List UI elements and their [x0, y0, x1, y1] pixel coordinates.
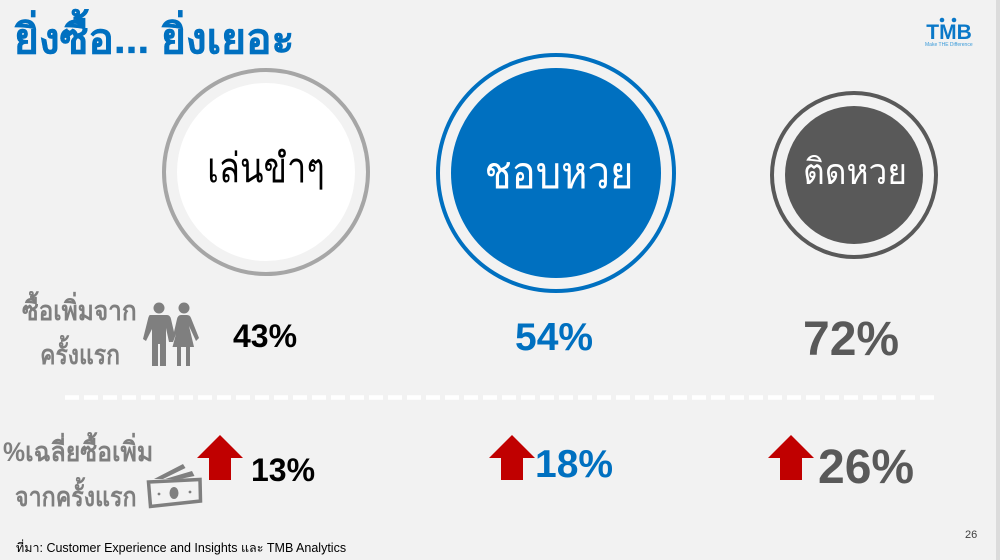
page number: 26 [965, 529, 977, 541]
source note: ที่มา: Customer Experience and Insights และ TMB Analytics [16, 541, 346, 555]
value: 43%: 43% [233, 318, 297, 354]
title: ยิ่งซื้อ... ยิ่งเยอะ [14, 16, 294, 62]
icon: couple [143, 302, 199, 366]
circle label light: เล่นขำๆ [207, 145, 325, 191]
value: 72%: 72% [803, 313, 899, 366]
arrow 2 [489, 435, 535, 480]
right edge strip [996, 0, 1000, 560]
circle label blue: ชอบหวย [485, 149, 633, 198]
logo: TMB [925, 18, 973, 48]
circle: ชอบหวย [436, 53, 676, 293]
circle graphic dark [770, 91, 938, 259]
logo tagline: Make THE Difference [925, 42, 973, 48]
circle: เล่นขำๆ [162, 68, 370, 276]
label line 2: ครั้งแรก [40, 340, 120, 370]
value: 13%: 13% [251, 452, 315, 488]
label line 2: จากครั้งแรก [15, 482, 137, 512]
label line 1: ซื้อเพิ่มจาก [22, 296, 137, 326]
value: 54%: 54% [515, 316, 593, 359]
divider [65, 396, 934, 400]
icon: money [146, 464, 202, 508]
row label: %เฉลี่ยซื้อเพิ่มจากครั้งแรก [3, 432, 153, 512]
logo wordmark: TMB [926, 20, 972, 44]
row label: ซื้อเพิ่มจากครั้งแรก [22, 291, 137, 370]
logo dots [940, 18, 956, 22]
arrow 1 [197, 435, 243, 480]
value: 26%: 26% [818, 441, 914, 494]
value: 18%: 18% [535, 443, 613, 486]
circle graphic blue [436, 53, 676, 293]
label line 1: %เฉลี่ยซื้อเพิ่ม [3, 437, 153, 467]
circle graphic light [162, 68, 370, 276]
arrow 3 [768, 435, 814, 480]
circle: ติดหวย [770, 91, 938, 259]
circle label dark: ติดหวย [803, 151, 907, 192]
